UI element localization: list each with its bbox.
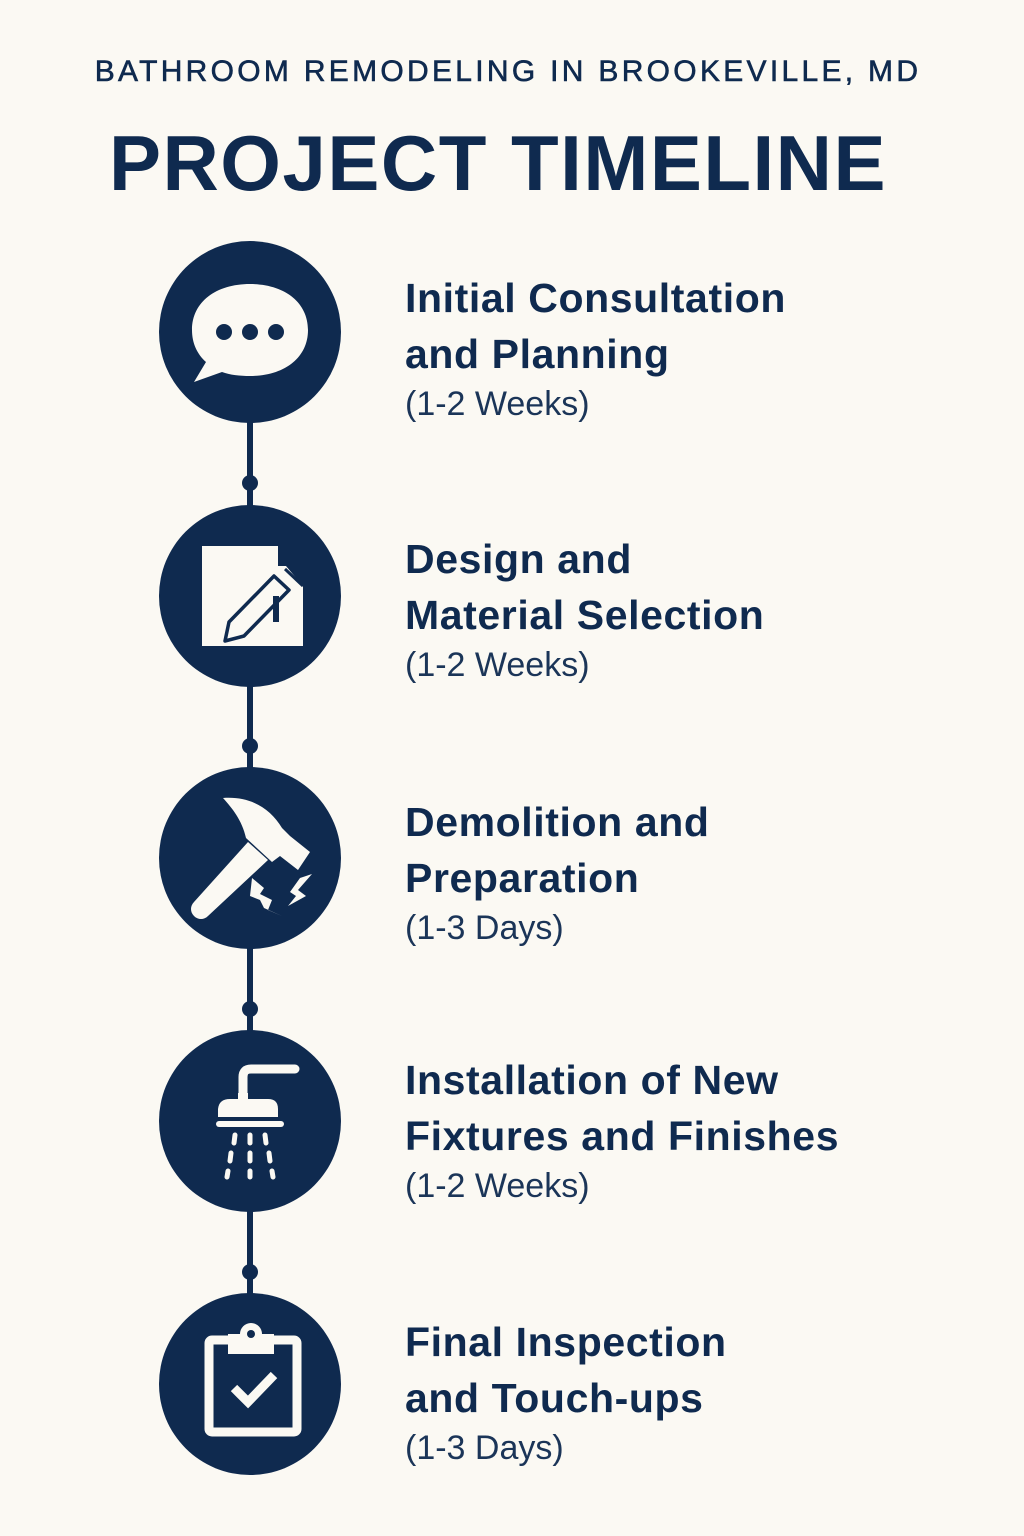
step 5 text: (1-3 Days) xyxy=(405,1429,564,1467)
step 1 text xyxy=(405,275,786,423)
icon: clipboard check xyxy=(159,1293,341,1475)
icon: hammer xyxy=(159,767,341,949)
step 5 text xyxy=(405,1319,727,1467)
step 2 text: Material Selection xyxy=(405,592,764,638)
subtitle: BATHROOM REMODELING IN BROOKEVILLE, MD xyxy=(95,55,921,88)
icon: shower xyxy=(159,1030,341,1212)
title: PROJECT TIMELINE xyxy=(109,119,887,207)
step 3 text xyxy=(405,799,710,947)
step 2 text: (1-2 Weeks) xyxy=(405,646,590,684)
icon: chat bubble xyxy=(159,241,341,423)
connector line xyxy=(242,332,258,1384)
step 3 text: (1-3 Days) xyxy=(405,909,564,947)
step 5 text: and Touch-ups xyxy=(405,1375,704,1421)
step 3 text: Preparation xyxy=(405,855,639,901)
icon: document with pencil xyxy=(159,505,341,687)
step 2 text xyxy=(405,536,764,684)
step 1 text: and Planning xyxy=(405,331,670,377)
step 4 text xyxy=(405,1057,839,1205)
step 4 text: Fixtures and Finishes xyxy=(405,1113,839,1159)
step 4 text: Installation of New xyxy=(405,1057,779,1103)
step 1 text: Initial Consultation xyxy=(405,275,786,321)
step 3 text: Demolition and xyxy=(405,799,710,845)
step 4 text: (1-2 Weeks) xyxy=(405,1167,590,1205)
step 1 text: (1-2 Weeks) xyxy=(405,385,590,423)
step 2 text: Design and xyxy=(405,536,632,582)
step 5 text: Final Inspection xyxy=(405,1319,727,1365)
